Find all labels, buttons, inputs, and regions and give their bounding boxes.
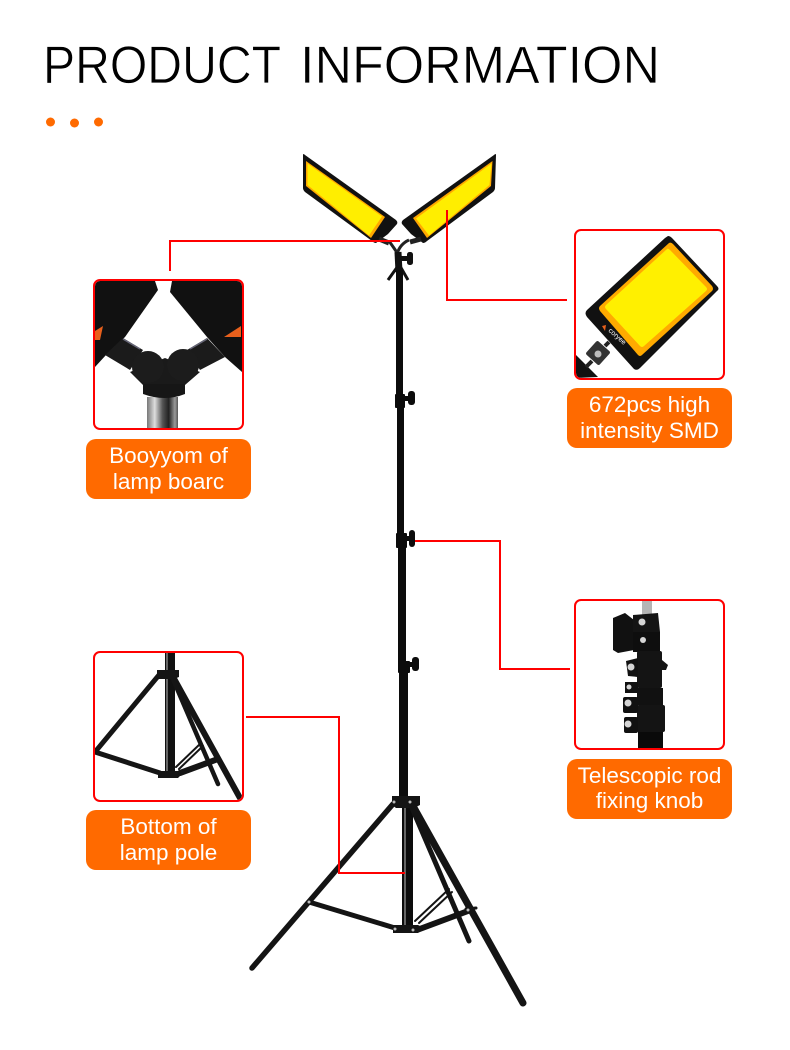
- frame: [575, 230, 724, 379]
- photo: lamp board: [576, 236, 718, 378]
- connector: lamp board to SMD detail: [447, 210, 567, 300]
- frame: [94, 652, 243, 801]
- product: tripod lamp stand: [252, 154, 523, 1003]
- tripod legs: [252, 804, 523, 1003]
- frame: [94, 280, 243, 429]
- label: 672pcs SMD: [567, 388, 732, 448]
- label: 672pcs SMD: intensity SMD: [580, 418, 719, 443]
- connector: fork to joint detail: [170, 241, 400, 271]
- title: PRODUCT: [43, 36, 281, 95]
- photo: lamp joint: [95, 281, 242, 429]
- label: telescopic rod knob: Telescopic rod: [578, 763, 721, 788]
- top knob: [401, 252, 413, 265]
- photo: tripod base: [95, 652, 240, 798]
- title: INFORMATION: [300, 36, 660, 95]
- pole clamps and knobs: [395, 391, 419, 673]
- panel: telescopic rod fixing knob: [575, 600, 724, 750]
- label: 672pcs SMD: 672pcs high: [589, 392, 710, 417]
- label: bottom of lamp board: Booyyom of: [109, 443, 229, 468]
- telescopic pole: [396, 270, 413, 930]
- label: bottom of lamp board: [86, 439, 251, 499]
- label: telescopic rod knob: [567, 759, 732, 819]
- label: bottom of lamp board: lamp boarc: [113, 469, 224, 494]
- connector: tripod base to bottom detail: [246, 717, 405, 873]
- title: [43, 36, 660, 95]
- label: telescopic rod knob: fixing knob: [596, 788, 703, 813]
- label: bottom of lamp pole: lamp pole: [120, 840, 217, 865]
- label: bottom of lamp pole: Bottom of: [120, 814, 217, 839]
- photo: rod clamps: [613, 601, 668, 750]
- tripod hubs: [308, 796, 470, 933]
- panel: bottom of lamp pole: [94, 652, 243, 801]
- panel: bottom of lamp board: [94, 280, 243, 429]
- panel: SMD lamp board: [575, 230, 724, 379]
- lamp head fork: [379, 239, 421, 280]
- frame: [575, 600, 724, 749]
- connector: knob to rod detail: [415, 541, 570, 669]
- photo: lamp board: coryee: [607, 327, 627, 347]
- decorative orange dots: [46, 118, 103, 128]
- left lamp panel: [303, 154, 397, 243]
- right lamp panel: [402, 154, 496, 243]
- label: bottom of lamp pole: [86, 810, 251, 870]
